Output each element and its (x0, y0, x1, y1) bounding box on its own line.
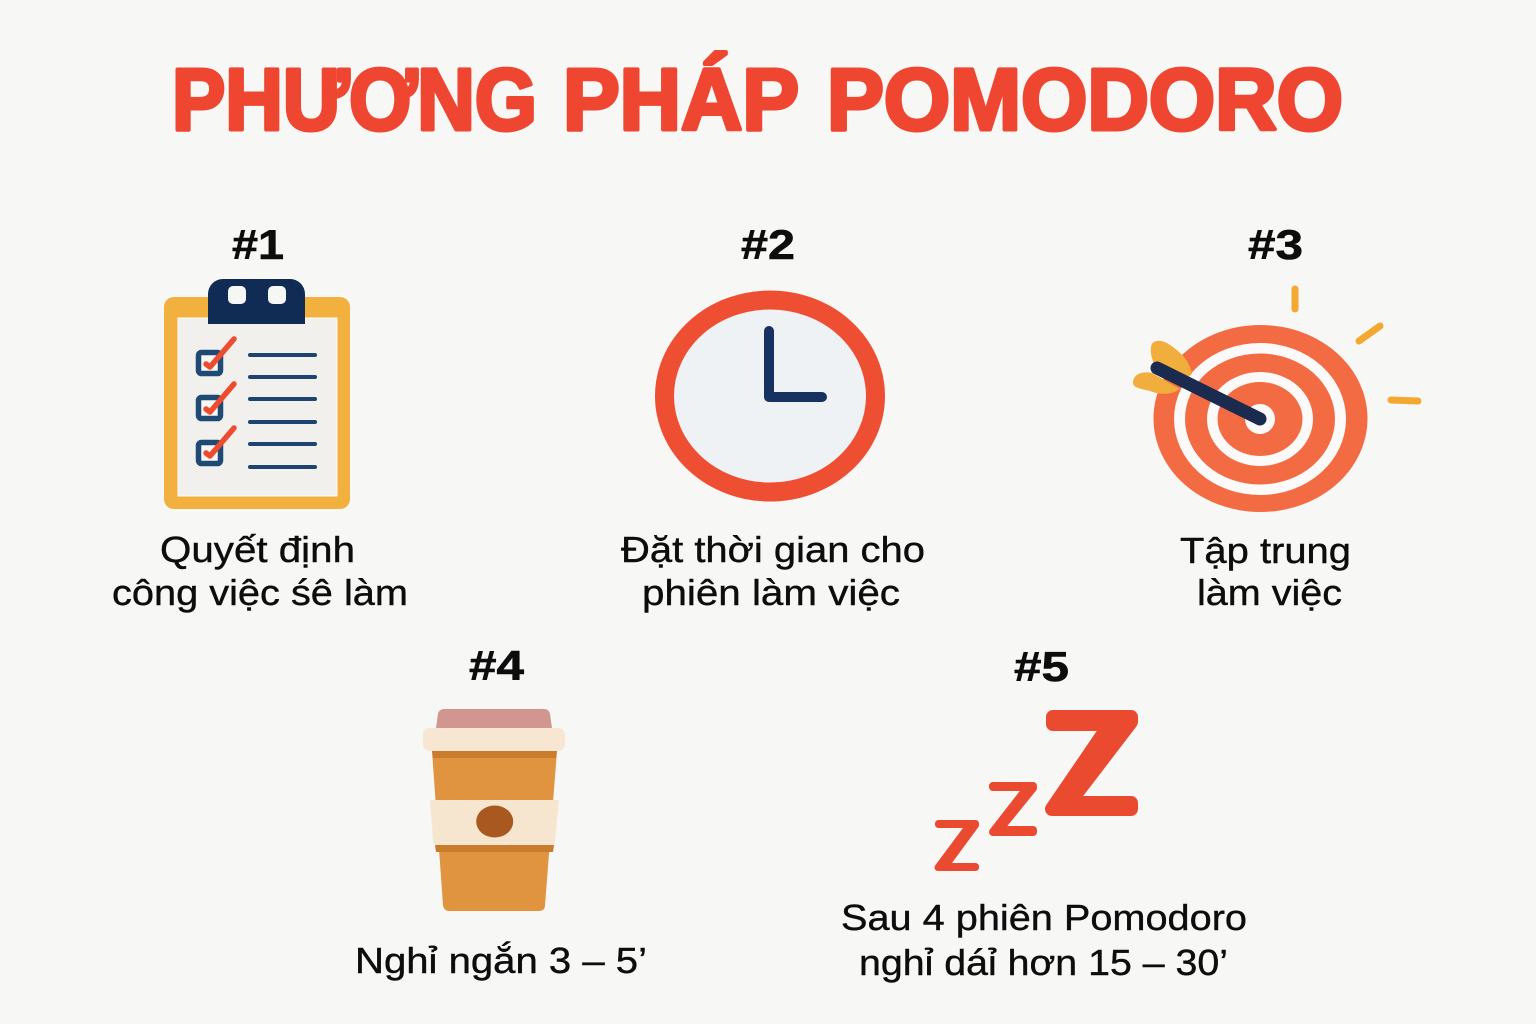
number 5: #5 (1014, 643, 1069, 690)
caption 3: Tập trung (1180, 530, 1351, 571)
number 3: #3 (1248, 221, 1303, 268)
icon: clock (664, 300, 876, 492)
step 3 (1133, 221, 1418, 613)
title (172, 52, 1343, 148)
step 1 (112, 221, 408, 613)
icon: sleeping zzz (938, 717, 1131, 868)
title: POMODORO (827, 52, 1343, 148)
caption 1: Quyết định (160, 529, 355, 570)
caption 5: nghỉ dáỉ hơn 15 – 30’ (859, 942, 1228, 983)
caption 3 (1180, 530, 1351, 613)
number 2: #2 (741, 221, 795, 268)
icon: target with arrow (1133, 289, 1418, 512)
caption 4: Nghỉ ngắn 3 – 5’ (355, 940, 647, 981)
caption 5: Sau 4 phiên Pomodoro (841, 897, 1247, 938)
caption 5 (841, 897, 1247, 983)
step 4 (355, 642, 647, 981)
step 2 (621, 221, 925, 613)
step 5 (841, 643, 1247, 983)
icon: coffee cup (423, 709, 565, 911)
caption 1 (112, 529, 408, 613)
number 1: #1 (232, 221, 284, 268)
caption 2 (621, 529, 925, 613)
caption 2: phiên làm việc (642, 572, 900, 613)
title: PHƯƠNG (172, 52, 537, 148)
title: PHÁP (563, 52, 799, 148)
caption 3: làm việc (1197, 572, 1342, 613)
number 4: #4 (469, 642, 525, 689)
icon: clipboard checklist (164, 279, 350, 509)
caption 1: công việc śê làm (112, 572, 408, 613)
caption 2: Đặt thời gian cho (621, 529, 925, 570)
